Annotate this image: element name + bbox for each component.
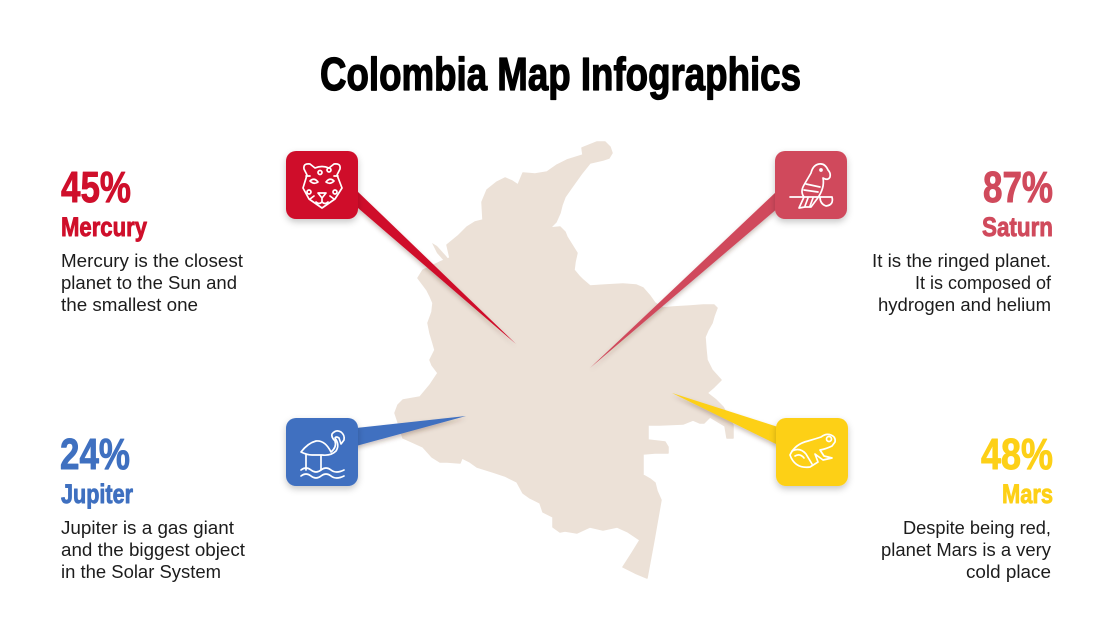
Jupiter percentage: 24%	[60, 430, 130, 479]
Saturn description: It is composed of	[915, 273, 1052, 293]
Mercury percentage: 45%	[61, 163, 131, 212]
Saturn description: hydrogen and helium	[878, 295, 1051, 315]
Mercury description	[61, 251, 243, 315]
Mars description	[881, 518, 1051, 582]
Saturn description	[872, 251, 1052, 315]
Jupiter heading: Jupiter	[61, 479, 133, 509]
icon: frog	[776, 418, 848, 486]
Mars description: cold place	[966, 562, 1051, 582]
Mars percentage: 48%	[981, 430, 1053, 479]
text block: Mercury	[61, 163, 243, 315]
pointer: Saturn	[590, 192, 778, 368]
Mars description: planet Mars is a very	[881, 540, 1051, 560]
Mercury heading: Mercury	[61, 212, 147, 242]
icon: flamingo	[286, 418, 358, 486]
text block: Mars	[881, 430, 1053, 582]
pointer: Mercury	[356, 190, 516, 344]
title: Colombia Map Infographics	[320, 48, 801, 100]
map detail: gulf island	[432, 243, 450, 262]
Saturn heading: Saturn	[982, 212, 1053, 242]
pointer: Mars	[672, 393, 778, 445]
Mars heading: Mars	[1002, 479, 1053, 509]
Mercury description: Mercury is the closest	[61, 251, 243, 271]
Jupiter description: in the Solar System	[61, 562, 221, 582]
Jupiter description	[61, 518, 245, 582]
Mercury description: the smallest one	[61, 295, 198, 315]
map of Colombia	[395, 142, 733, 578]
Mars description: Despite being red,	[903, 518, 1051, 538]
text block: Saturn	[872, 163, 1053, 315]
icon: jaguar	[286, 151, 358, 219]
Saturn percentage: 87%	[983, 163, 1053, 212]
Mercury description: planet to the Sun and	[61, 273, 237, 293]
pointer: Jupiter	[356, 416, 466, 446]
Jupiter description: Jupiter is a gas giant	[61, 518, 234, 538]
text block: Jupiter	[60, 430, 245, 582]
Saturn description: It is the ringed planet.	[872, 251, 1051, 271]
Jupiter description: and the biggest object	[61, 540, 245, 560]
icon: parrot	[775, 151, 847, 219]
